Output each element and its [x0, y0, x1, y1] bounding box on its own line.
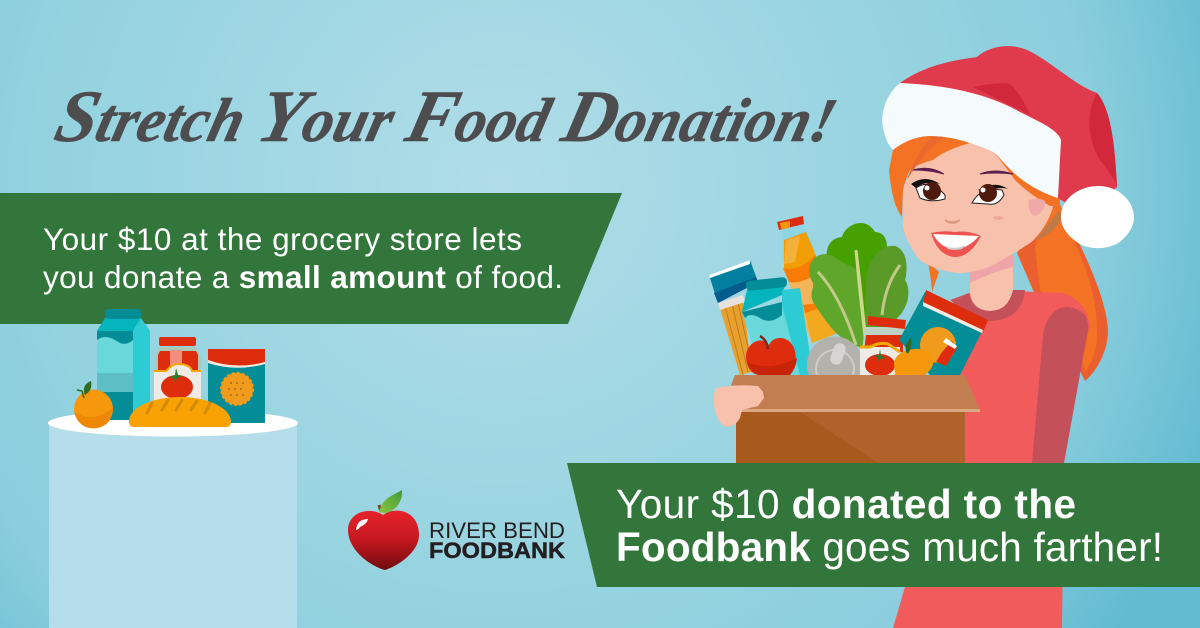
icon: orange fruit: [894, 338, 933, 375]
icon: milk carton: [97, 309, 150, 420]
collar: [951, 290, 1025, 321]
hair right: [995, 153, 1060, 206]
icon: lettuce: [809, 223, 908, 350]
text: logo wordmark: [429, 518, 566, 563]
icon: teal tin: [208, 349, 265, 423]
icon: tomato sauce jar: [154, 337, 201, 402]
food box group: [709, 216, 988, 464]
mouth: [931, 231, 981, 257]
icon: teal can: [899, 290, 988, 375]
pedestal with small food group: [48, 309, 298, 628]
icon: pasta packet: [709, 260, 758, 375]
brows: [913, 168, 944, 174]
icon: bread loaf: [129, 397, 231, 427]
hair strand left: [928, 262, 939, 292]
body: [893, 291, 1090, 628]
logo: River Bend Food Bank: [348, 490, 566, 570]
icon: cracker: [920, 327, 957, 366]
neck: [970, 255, 1013, 311]
long hair back: [1017, 203, 1108, 381]
santa hat: [882, 46, 1134, 248]
icon: orange: [74, 381, 113, 428]
icon: jar: [860, 316, 906, 376]
panel: donation banner: [567, 463, 1200, 587]
hair fringe: [889, 136, 970, 217]
text: foodbank message: Your $10 donated to the: [616, 481, 1076, 527]
text: logo wordmark: FOODBANK: [429, 538, 566, 563]
icon: red apple: [746, 336, 797, 375]
hand: [714, 385, 764, 427]
nose: [945, 220, 960, 223]
left eye: [911, 179, 945, 201]
icon: tin can: [807, 337, 863, 375]
sleeve: [1032, 307, 1088, 463]
icon: apple logo: [348, 490, 419, 570]
icon: carton: [742, 277, 813, 375]
hair shadow: [1036, 210, 1062, 240]
face: [903, 143, 1053, 273]
icon: juice bottle: [777, 216, 838, 343]
panel: small donation banner: [0, 193, 622, 324]
cardboard box: [731, 375, 980, 464]
text: grocery store message: you donate a small amount of food.: [43, 259, 563, 295]
text: foodbank message: Foodbank goes much farther!: [616, 524, 1163, 570]
hat brim: [882, 83, 1061, 198]
hat pompom: [1061, 186, 1134, 248]
title: Stretch Your Food Donation!: [48, 76, 846, 158]
woman character: [882, 46, 1134, 628]
text: logo wordmark: RIVER BEND: [429, 518, 565, 543]
text: grocery store message: Your $10 at the grocery store lets: [43, 221, 522, 257]
right eye: [972, 184, 1008, 204]
cheek: [1029, 199, 1045, 216]
